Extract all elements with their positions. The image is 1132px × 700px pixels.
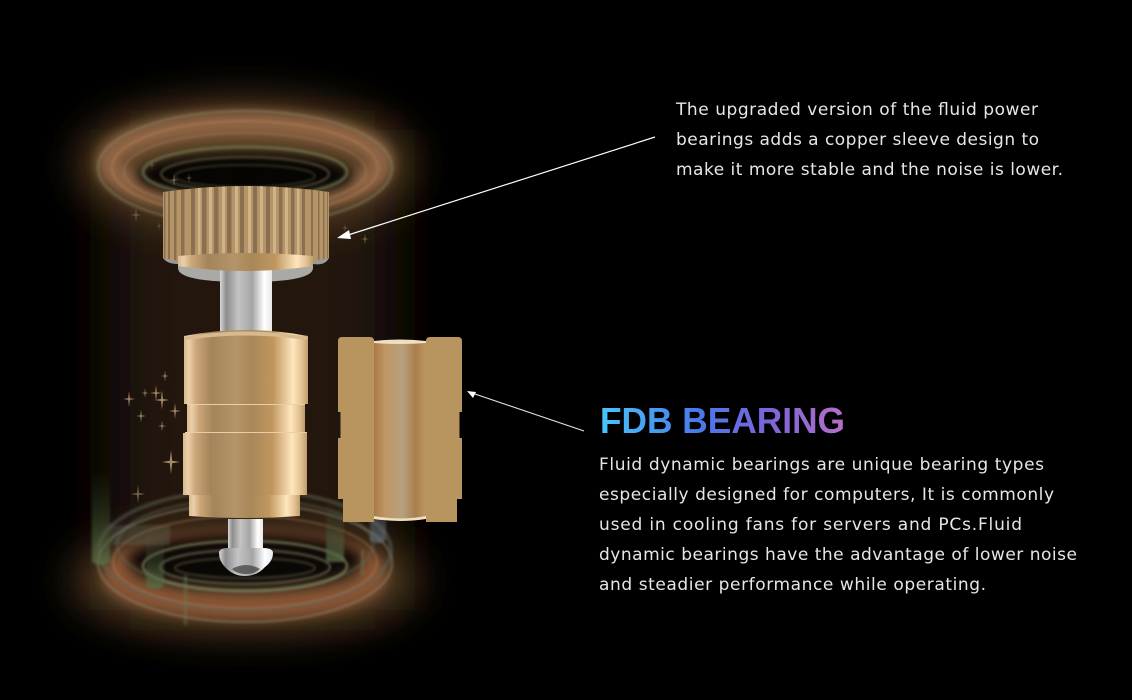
brass sleeve body xyxy=(183,330,308,518)
arrow to sleeve xyxy=(467,391,584,431)
sparkles xyxy=(123,159,369,504)
lower description text: Fluid dynamic bearings are unique bearing types xyxy=(599,455,1044,475)
lower description text: used in cooling fans for servers and PCs.Fluid xyxy=(599,515,1022,535)
bottom energy rings xyxy=(73,470,417,630)
steel pin and head xyxy=(219,519,273,576)
copper sleeve cross-section xyxy=(338,337,462,522)
lower description text: especially designed for computers, It is commonly xyxy=(599,485,1054,505)
infographic canvas xyxy=(54,74,1076,658)
upper description text: bearings adds a copper sleeve design to xyxy=(676,130,1039,150)
bearing shaft assembly xyxy=(163,180,329,576)
top energy rings xyxy=(80,103,410,227)
knurled copper cap xyxy=(163,180,329,285)
lower description text: dynamic bearings have the advantage of lower noise xyxy=(599,545,1077,565)
heading: FDB BEARING xyxy=(600,400,845,441)
lower description text: and steadier performance while operating. xyxy=(599,575,986,595)
background glow column xyxy=(110,130,395,610)
upper description text: make it more stable and the noise is lower. xyxy=(676,160,1063,180)
upper description text xyxy=(675,100,1063,180)
lower description text xyxy=(599,455,1077,595)
upper description text: The upgraded version of the fluid power xyxy=(675,100,1038,120)
arrow to copper cap xyxy=(337,137,655,239)
steel shaft xyxy=(220,262,272,332)
green light bars xyxy=(92,470,386,625)
